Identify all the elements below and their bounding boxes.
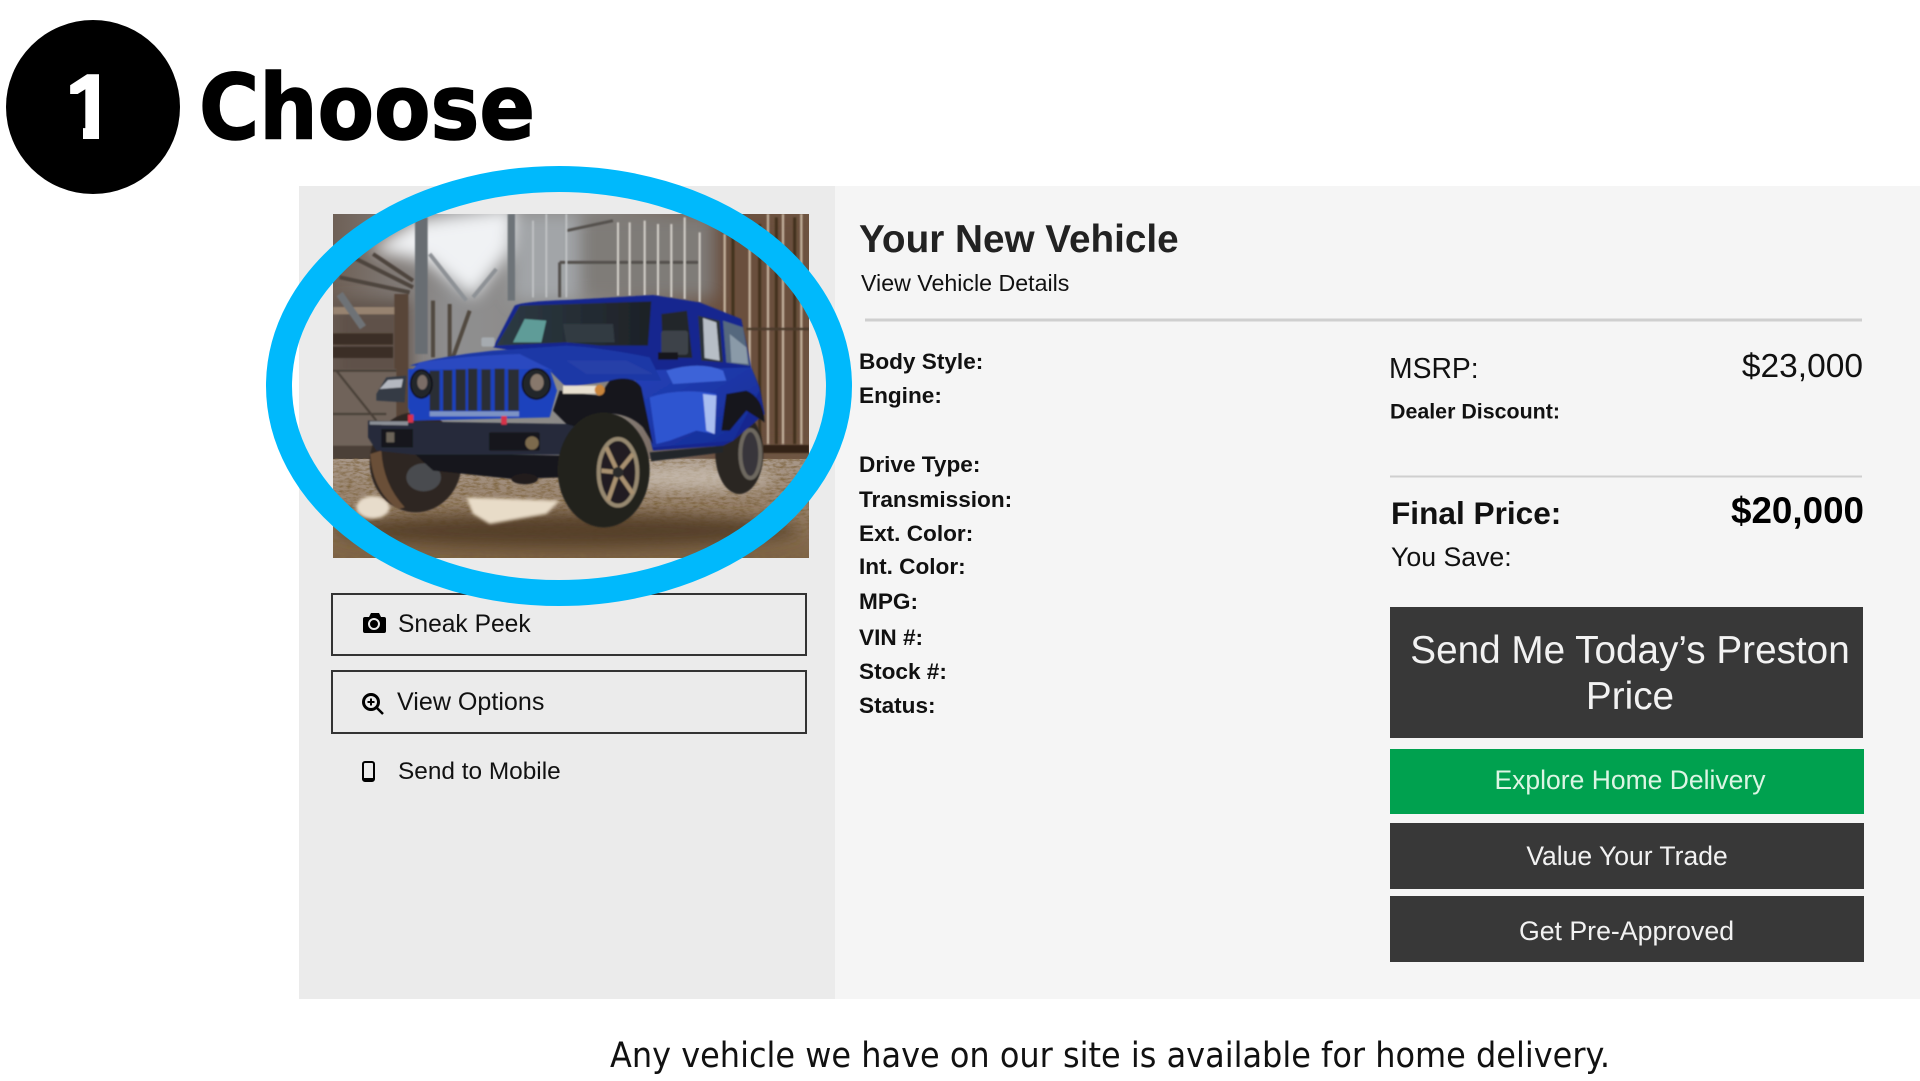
icon: phone [363,762,374,781]
button: send me today's preston price: Send Me Today’s Preston [1410,629,1850,672]
highlight ring around vehicle photo [279,179,839,593]
barn wood and beams [333,214,809,449]
pricing block: $23,000 [1742,348,1863,385]
big front wheel [558,413,650,527]
headlights [411,369,550,399]
vehicle specification list: Body Style: [859,349,983,374]
windshield [496,301,651,346]
bumper [368,421,578,455]
running board [650,446,723,461]
left door mirror [376,376,406,402]
body side panel [633,367,760,447]
pricing block: $20,000 [1731,490,1864,531]
button: value your trade: Value Your Trade [1526,841,1728,871]
fender and turn lamp [553,378,653,444]
pricing block: MSRP: [1389,352,1479,384]
button: value your trade [1390,823,1864,889]
rear wheel [715,413,763,494]
vehicle specification list: Ext. Color: [859,521,973,546]
vehicle heading: Your New Vehicle [859,218,1179,261]
far front wheel [370,412,462,512]
step number badge [6,20,180,194]
vehicle specification list: Status: [859,693,936,718]
link: send to mobile: Send to Mobile [398,758,561,785]
vehicle specification list: Int. Color: [859,554,966,579]
pricing block [1389,348,1864,572]
button: sneak peek: Sneak Peek [398,611,531,638]
side mirror [661,331,688,355]
vehicle heading: View Vehicle Details [861,270,1069,296]
icon: camera [363,613,386,633]
button: get pre-approved: Get Pre-Approved [1519,916,1734,946]
divider [865,318,1862,322]
button: get pre-approved [1390,896,1864,962]
caption: Any vehicle we have on our site is available for home delivery. [610,1036,1610,1076]
button: send me today's preston price [1390,607,1863,738]
step number badge: 1 [65,57,117,159]
icon: magnifier [364,694,383,714]
grille slots [430,369,519,411]
button: view options [332,671,806,733]
panel: vehicle details [835,186,1920,999]
vehicle heading [859,218,1179,296]
blue body shell and hardtop [493,295,765,451]
hood [410,346,661,387]
button: view options: View Options [397,688,544,716]
pricing block: Final Price: [1391,495,1561,531]
button: explore home delivery [1390,749,1864,814]
rear fender [721,391,765,431]
vehicle specification list: MPG: [859,589,918,614]
vehicle specification list: Engine: [859,383,942,408]
small roof mirror [481,337,495,347]
side windows [661,311,692,358]
underbody [413,452,566,479]
vehicle specification list [859,349,1012,718]
panel: vehicle media [299,186,835,999]
pricing block: You Save: [1391,542,1512,572]
vehicle specification list: Drive Type: [859,452,980,477]
title: Choose [199,56,535,160]
pricing block: Dealer Discount: [1390,400,1560,424]
button: sneak peek [332,594,806,655]
front fascia [408,369,557,421]
floor [333,459,809,558]
vehicle specification list: Transmission: [859,487,1012,512]
vehicle specification list: VIN #: [859,625,923,650]
button: send me today's preston price: Price [1586,675,1674,718]
button: explore home delivery: Explore Home Delivery [1495,765,1766,795]
vehicle specification list: Stock #: [859,659,947,684]
vehicle photo: blue jeep in a barn [333,207,809,558]
